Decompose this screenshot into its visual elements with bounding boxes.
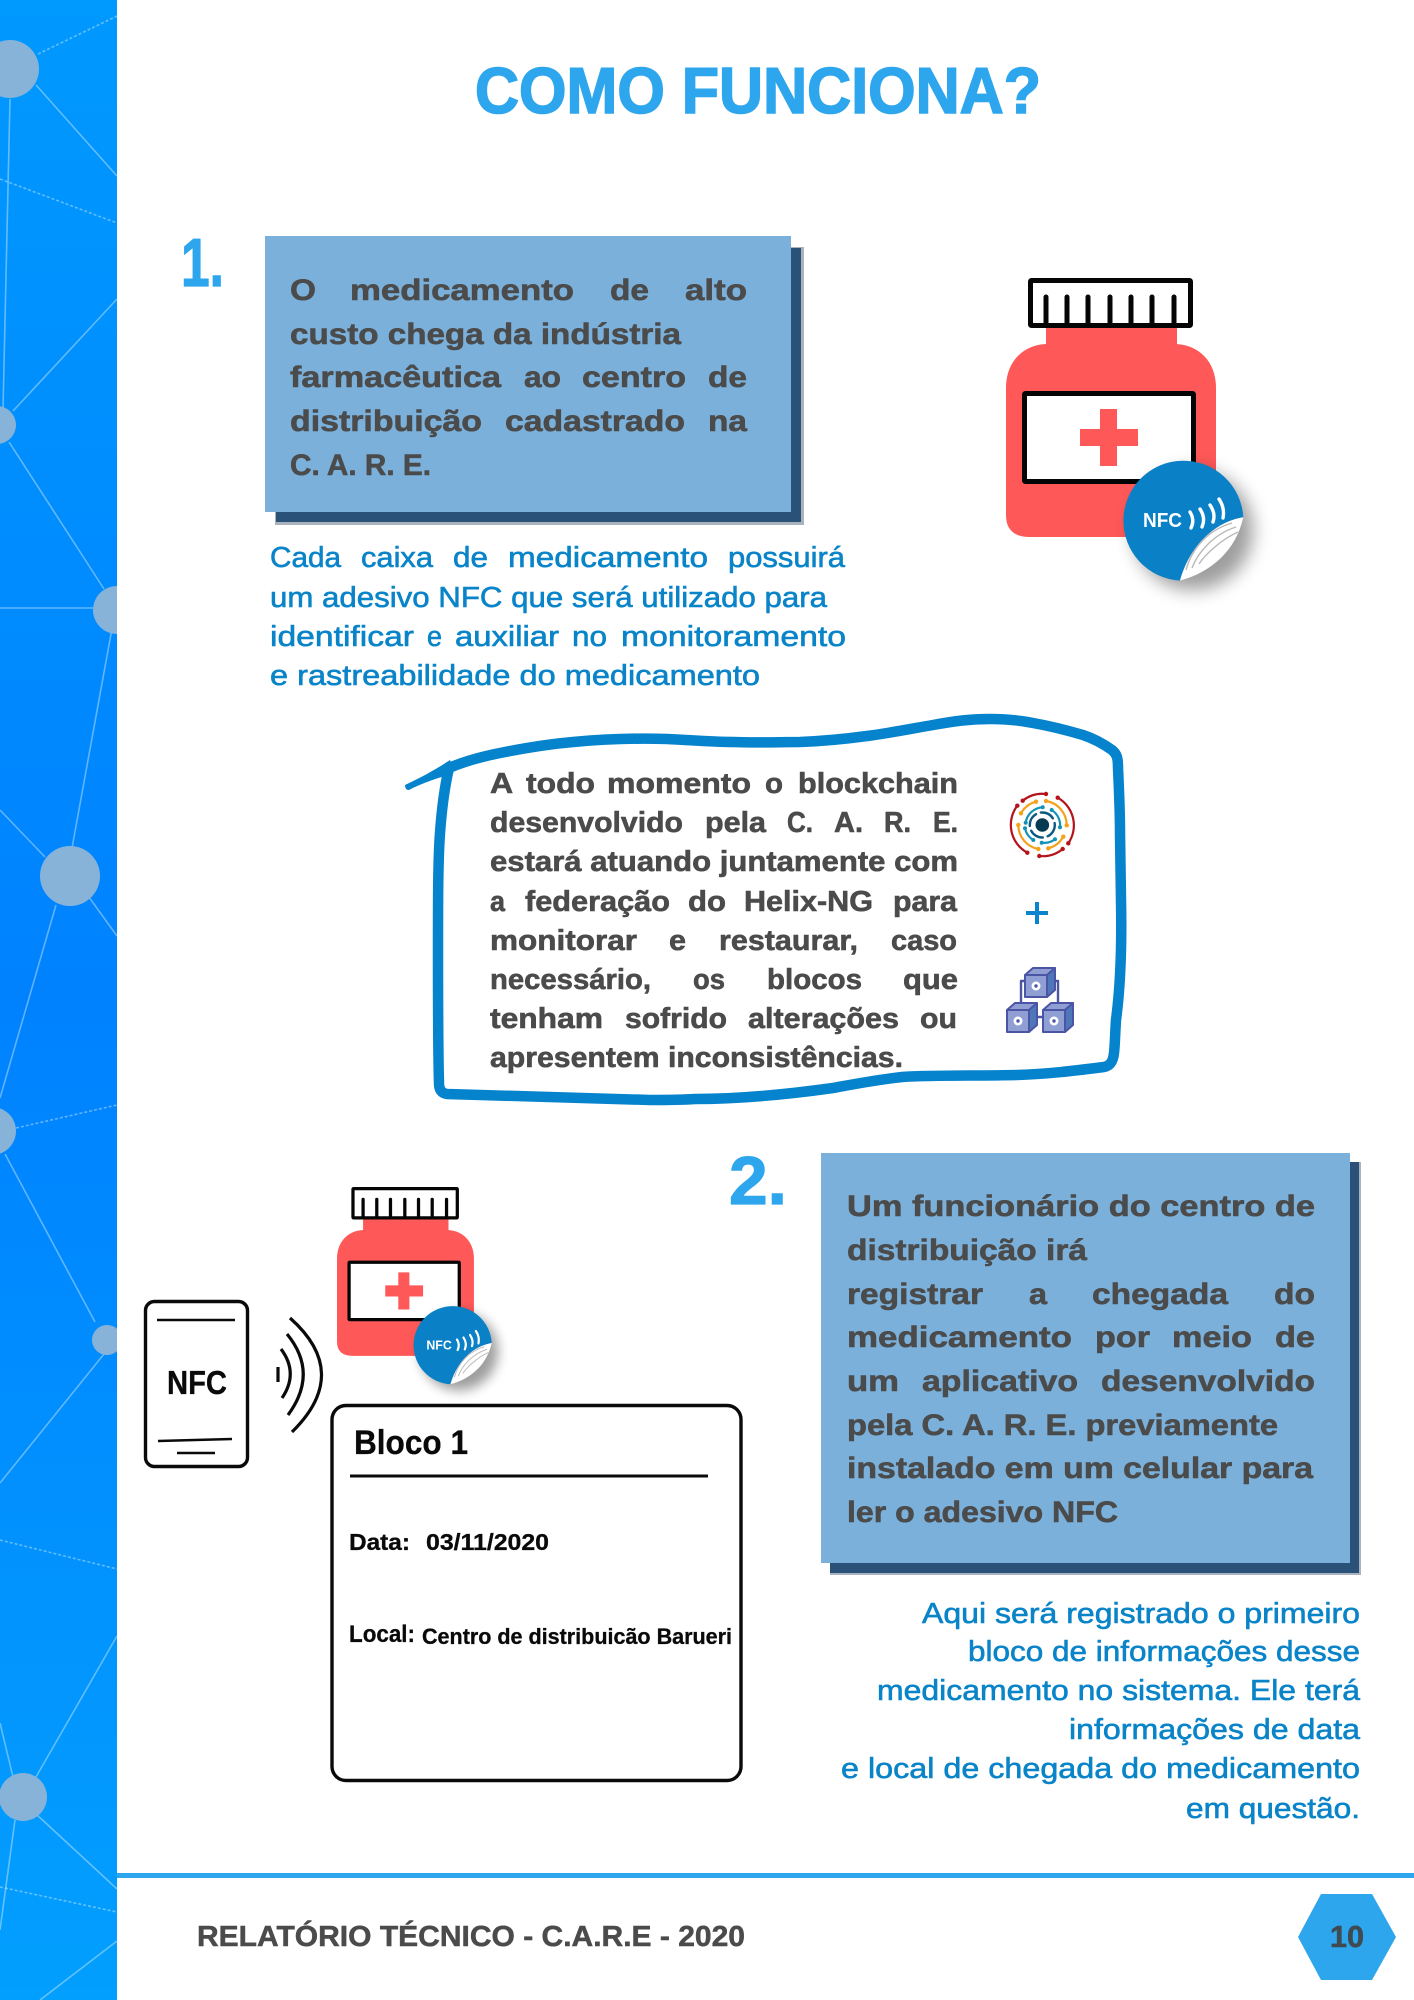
text: first block explanation: Aqui será registrado o primeiro (922, 1598, 1360, 1630)
text: step 1 description: custo chega da indústria (290, 318, 681, 351)
text: first block explanation: e local de chegada do medicamento (841, 1753, 1360, 1785)
text: first block explanation (841, 1598, 1361, 1825)
text: callout body: C. (787, 807, 813, 839)
text: callout body: federação (525, 886, 670, 918)
text: NFC sticker explanation: no (572, 621, 607, 653)
icon: medicine bottle with NFC sticker (1006, 280, 1253, 590)
text: step 2 description: do (1274, 1278, 1315, 1311)
text: callout body: necessário, (490, 964, 651, 996)
text: callout body: monitorar (490, 925, 637, 957)
text: step 2 description: medicamento (847, 1321, 1072, 1354)
text: NFC sticker explanation: de (453, 542, 488, 574)
text: callout body: R. (884, 807, 911, 839)
text: callout body: e (669, 925, 686, 957)
text: first block explanation: bloco de informações desse (968, 1636, 1360, 1668)
text: step 2 description: registrar (847, 1278, 983, 1311)
text: step 1 description: ao (524, 361, 561, 394)
text: first block explanation: em questão. (1186, 1793, 1360, 1825)
text: callout body: do (688, 886, 726, 918)
text: step 2 description: instalado em um celular para (847, 1452, 1313, 1485)
text: step 2 description: pela C. A. R. E. previamente (847, 1409, 1278, 1442)
text: NFC sticker explanation (270, 542, 846, 692)
text: callout body: desenvolvido (490, 807, 683, 839)
text: callout body: blockchain (798, 768, 958, 800)
text: NFC sticker explanation: um adesivo NFC que será utilizado para (270, 582, 828, 614)
text: callout body: E. (933, 807, 958, 839)
text: callout body: A (490, 768, 513, 800)
text: callout body: sofrido (625, 1003, 727, 1035)
icon: small medicine bottle with NFC sticker (337, 1189, 498, 1390)
text: first block explanation: medicamento no sistema. Ele terá (877, 1675, 1361, 1707)
text: step 2 description: distribuição irá (847, 1234, 1087, 1267)
text: callout body: todo (526, 768, 595, 800)
text: step 2 description: por (1095, 1321, 1150, 1354)
text: step 2 description: ler o adesivo NFC (847, 1496, 1118, 1529)
step number 1: 1. (181, 225, 224, 301)
text: callout body: apresentem inconsistências. (490, 1042, 903, 1074)
text: step 2 description: aplicativo (922, 1365, 1078, 1398)
icon: connected blocks (1007, 968, 1073, 1032)
text: step 2 description: Um funcionário do centro de (847, 1190, 1315, 1223)
icon: plus sign (1026, 902, 1048, 924)
text: step 2 description: desenvolvido (1101, 1365, 1315, 1398)
text: step 1 description: centro (582, 361, 686, 394)
text: step 2 description: meio (1172, 1321, 1252, 1354)
text: NFC sticker explanation: e (427, 621, 442, 653)
icon: NFC signal waves (278, 1318, 322, 1432)
page number badge: 10 (1330, 1919, 1364, 1954)
text: NFC sticker explanation: Cada (270, 542, 342, 574)
card field: date: Data: (349, 1529, 410, 1555)
text: NFC sticker explanation: auxiliar (455, 621, 559, 653)
text: step 1 description: na (708, 405, 747, 438)
step number 2: 2. (729, 1143, 787, 1219)
text: NFC sticker explanation: caixa (361, 542, 434, 574)
text: NFC sticker explanation: e rastreabilidade do medicamento (270, 660, 760, 692)
text: callout body: momento (607, 768, 751, 800)
text: step 1 description: medicamento (350, 274, 574, 307)
card heading: Bloco 1 (354, 1424, 468, 1462)
text: step 1 description: farmacêutica (290, 361, 501, 394)
text: callout body: tenham (490, 1003, 603, 1035)
text: first block explanation: informações de data (1069, 1714, 1361, 1746)
text: callout body: a (490, 886, 506, 918)
card field: location: Centro de distribuicão Barueri (422, 1624, 732, 1649)
icon: NFC phone (146, 1302, 248, 1466)
page number badge (1298, 1894, 1396, 1980)
text: step 1 description: C. A. R. E. (290, 449, 431, 482)
text: callout body: estará atuando juntamente com (490, 846, 958, 878)
footer rule (117, 1873, 1414, 1878)
text: callout body: A. (834, 807, 863, 839)
text: callout body: o (765, 768, 783, 800)
text: step 1 description: alto (685, 274, 747, 307)
text: step 2 description (847, 1190, 1315, 1529)
text: NFC sticker explanation: identificar (270, 621, 414, 653)
text: callout body: que (903, 964, 958, 996)
text: step 2 description: um (847, 1365, 899, 1398)
icon: small medicine bottle with NFC sticker: NFC (426, 1337, 452, 1352)
text: callout body: blocos (767, 964, 862, 996)
text: callout body: Helix-NG (744, 886, 873, 918)
text: step 1 description (290, 274, 747, 482)
panel: step 2 text box (821, 1153, 1361, 1575)
panel: Bloco 1 record card (332, 1406, 741, 1780)
text: step 1 description: de (610, 274, 649, 307)
text: NFC sticker explanation: monitoramento (621, 621, 846, 653)
text: NFC sticker explanation: possuirá (728, 542, 846, 574)
text: step 1 description: de (708, 361, 747, 394)
card field: location: Local: (349, 1621, 415, 1648)
callout: blockchain monitoring (405, 719, 1121, 1100)
card field: date: 03/11/2020 (426, 1529, 549, 1555)
panel: step 1 text box (265, 236, 804, 525)
text: step 1 description: distribuição (290, 405, 482, 438)
icon: circular blockchain logo (1011, 792, 1074, 858)
text: NFC sticker explanation: medicamento (508, 542, 708, 574)
text: callout body: ou (920, 1003, 957, 1035)
icon: medicine bottle with NFC sticker: NFC (1143, 510, 1182, 532)
text: step 2 description: chegada (1092, 1278, 1228, 1311)
text: step 2 description: de (1275, 1321, 1315, 1354)
text: callout body: alterações (748, 1003, 899, 1035)
text: callout body: pela (705, 807, 767, 839)
text: step 1 description: cadastrado (505, 405, 685, 438)
title: COMO FUNCIONA? (475, 54, 1041, 127)
text: step 2 description: a (1029, 1278, 1047, 1311)
footer text: RELATÓRIO TÉCNICO - C.A.R.E - 2020 (197, 1919, 745, 1953)
text: callout body: para (893, 886, 958, 918)
text: callout body: caso (891, 925, 957, 957)
text: callout body: os (693, 964, 725, 996)
text: callout body (490, 768, 958, 1074)
text: callout body: restaurar, (719, 925, 858, 957)
sidebar: blue network pattern (0, 0, 117, 2000)
icon: NFC phone: NFC (167, 1364, 227, 1401)
text: step 1 description: O (290, 274, 316, 307)
